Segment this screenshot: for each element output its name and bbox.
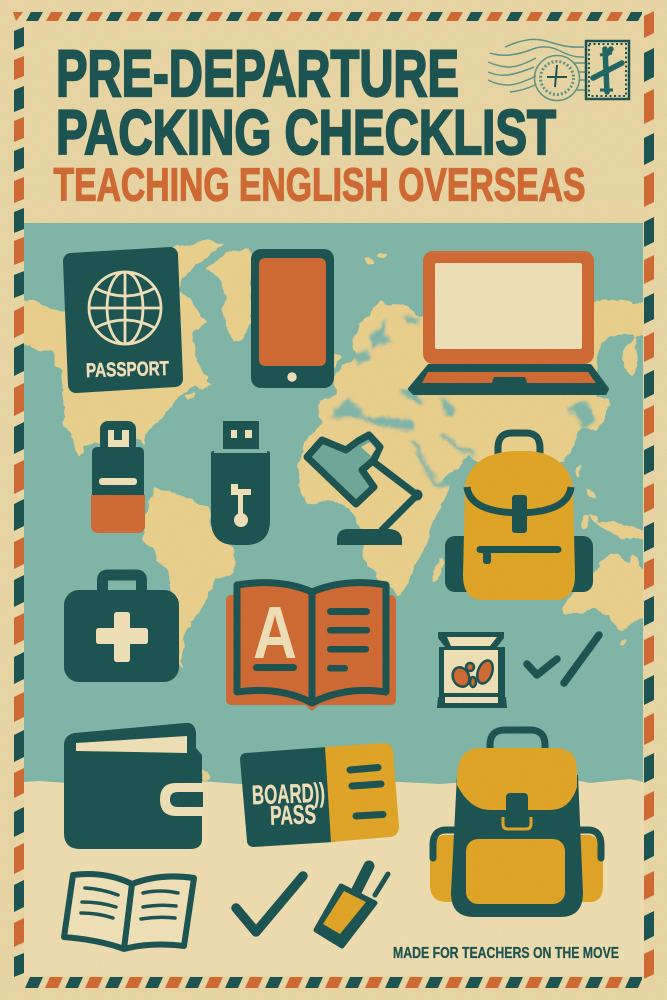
passport label: PASSPORT xyxy=(86,358,169,382)
icon: boarding pass: PASS xyxy=(269,799,317,831)
icon: laptop xyxy=(410,251,607,393)
letter A: A xyxy=(253,591,297,674)
icon: checkmark and slash xyxy=(527,635,599,683)
icon: flash drive xyxy=(91,421,145,533)
world map xyxy=(16,223,652,788)
icon: yellow backpack xyxy=(445,433,593,600)
icon: desk lamp xyxy=(307,435,422,545)
title: PRE-DEPARTURE xyxy=(56,36,459,110)
globe xyxy=(89,272,161,344)
icon: first aid kit xyxy=(64,575,179,682)
icon: passport xyxy=(71,255,175,385)
icon: postmark and stamp xyxy=(488,39,629,100)
icon: boarding pass xyxy=(246,743,399,842)
icon: small open book xyxy=(64,874,194,949)
icon: large checkmark xyxy=(236,876,303,932)
icon: open book xyxy=(226,583,396,711)
icon: teal backpack xyxy=(430,730,603,917)
icon: phone xyxy=(251,249,334,388)
icon: bottle tag xyxy=(316,866,388,946)
icon: snack bag xyxy=(437,632,507,708)
title xyxy=(56,36,556,168)
icon: wallet xyxy=(64,723,203,849)
icon: usb stick xyxy=(211,421,270,545)
boarding pass label: BOARD)) xyxy=(251,778,325,810)
